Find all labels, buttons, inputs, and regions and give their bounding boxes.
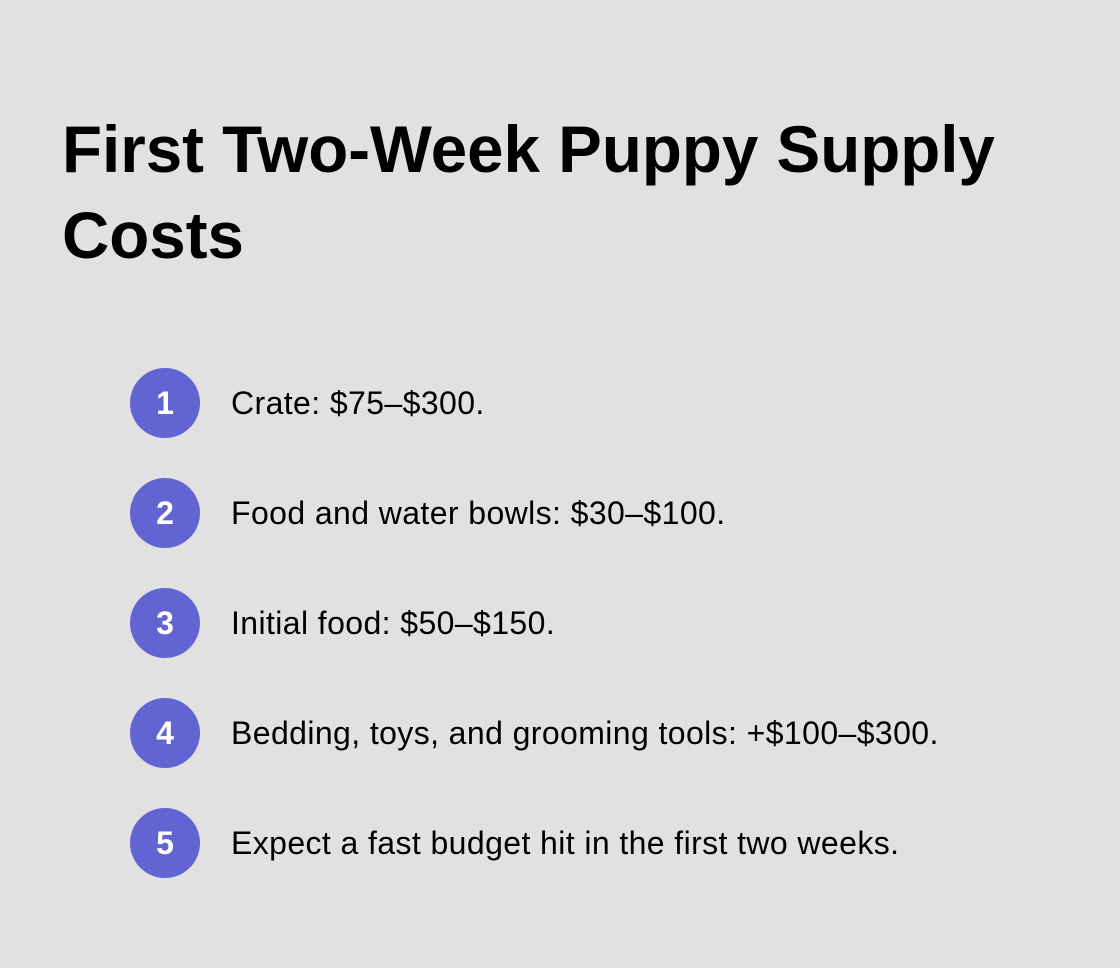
text: budget: Expect a fast budget hit in the first two weeks. — [231, 825, 899, 861]
text: food: Initial food: $50–$150. — [231, 605, 555, 641]
icon: number 1 — [130, 368, 200, 438]
icon: number 5: 5 — [156, 825, 174, 861]
text: crate: Crate: $75–$300. — [231, 385, 485, 421]
list item 3 — [130, 588, 555, 658]
list item 4 — [130, 698, 939, 768]
list item 5 — [130, 808, 899, 878]
icon: number 3: 3 — [156, 605, 174, 641]
list item 1 — [130, 368, 485, 438]
text: bowls: Food and water bowls: $30–$100. — [231, 495, 726, 531]
icon: number 2: 2 — [156, 495, 174, 531]
icon: number 2 — [130, 478, 200, 548]
icon: number 1: 1 — [156, 385, 174, 421]
text: bedding: Bedding, toys, and grooming tools: +$100–$300. — [231, 715, 939, 751]
list item 2 — [130, 478, 726, 548]
title: First Two-Week Puppy Supply Costs — [62, 113, 995, 272]
icon: number 3 — [130, 588, 200, 658]
icon: number 4: 4 — [156, 715, 174, 751]
icon: number 5 — [130, 808, 200, 878]
icon: number 4 — [130, 698, 200, 768]
